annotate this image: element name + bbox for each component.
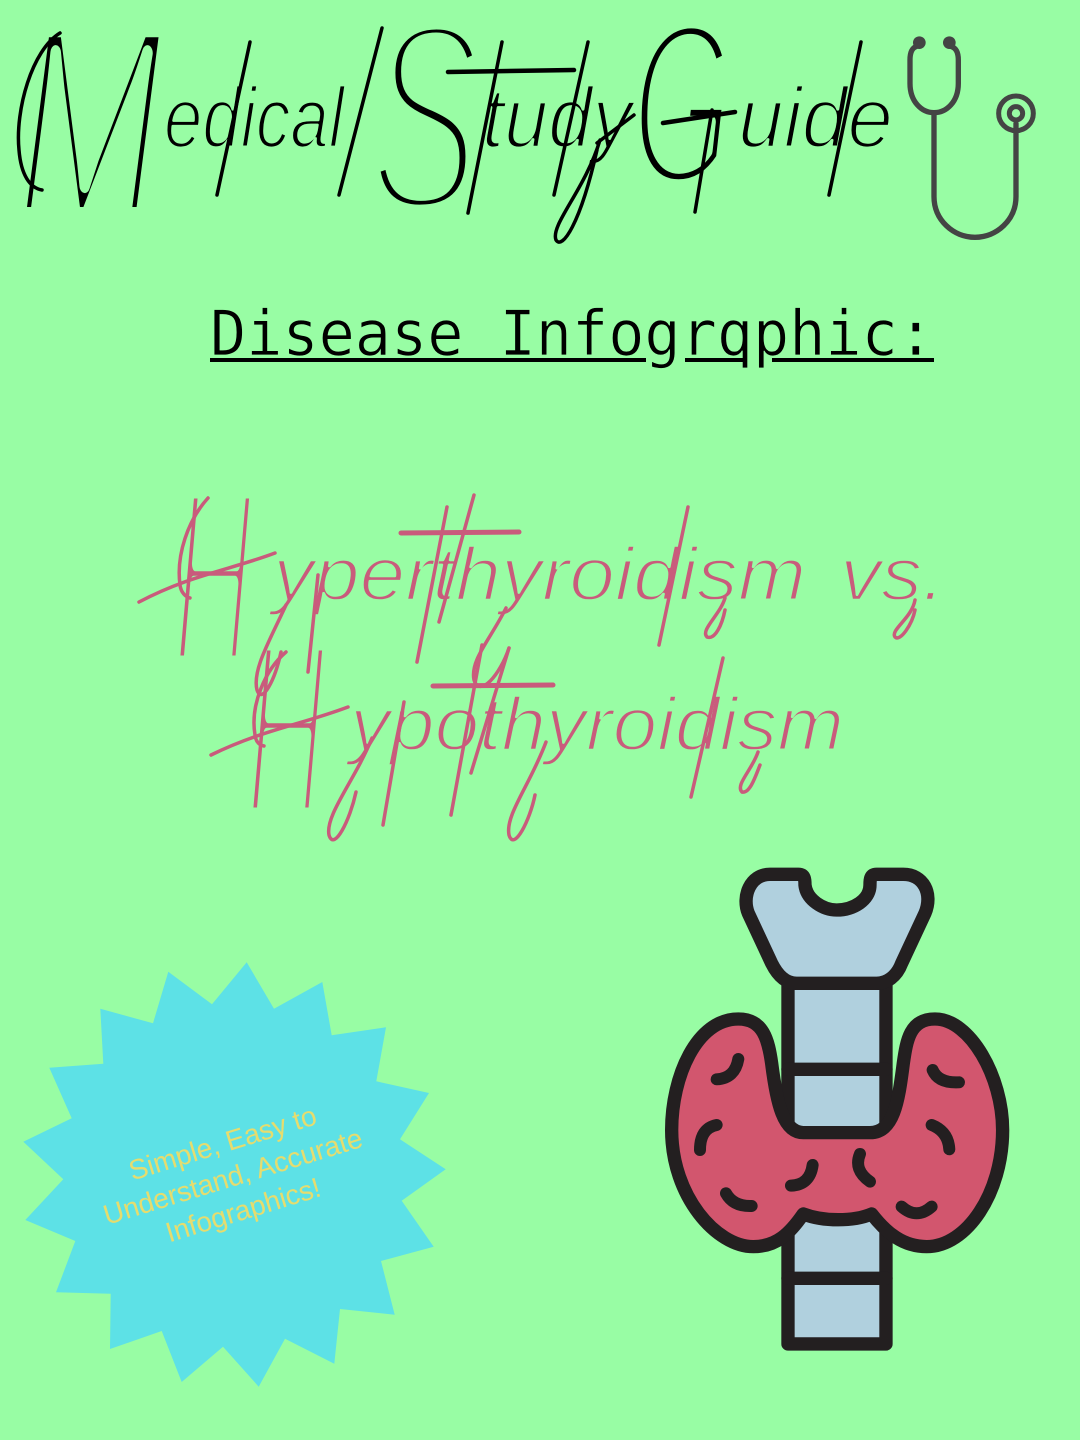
heading: disease infographic: Disease Infogrqphic: (210, 297, 934, 370)
subtitle: disease names (139, 437, 945, 868)
icon: stethoscope (910, 36, 1033, 237)
subtitle: disease names: yperthyroidism (268, 532, 829, 616)
subtitle: disease names: H (173, 437, 253, 716)
badge: starburst callout: Understand, Accurate (100, 1122, 366, 1231)
title: uide (738, 71, 893, 166)
subtitle: disease names: H (246, 589, 326, 868)
subtitle: disease names: vs. (840, 532, 945, 616)
subtitle: disease names: ypothyroidism (345, 682, 844, 766)
badge: starburst callout: Infographics! (162, 1172, 324, 1248)
badge: starburst callout: Simple, Easy to (125, 1100, 320, 1186)
title: tudy (482, 71, 636, 166)
badge: starburst callout (23, 962, 446, 1387)
title: edical (164, 71, 346, 166)
icon: thyroid gland and trachea (672, 874, 1003, 1344)
title (15, 0, 893, 273)
